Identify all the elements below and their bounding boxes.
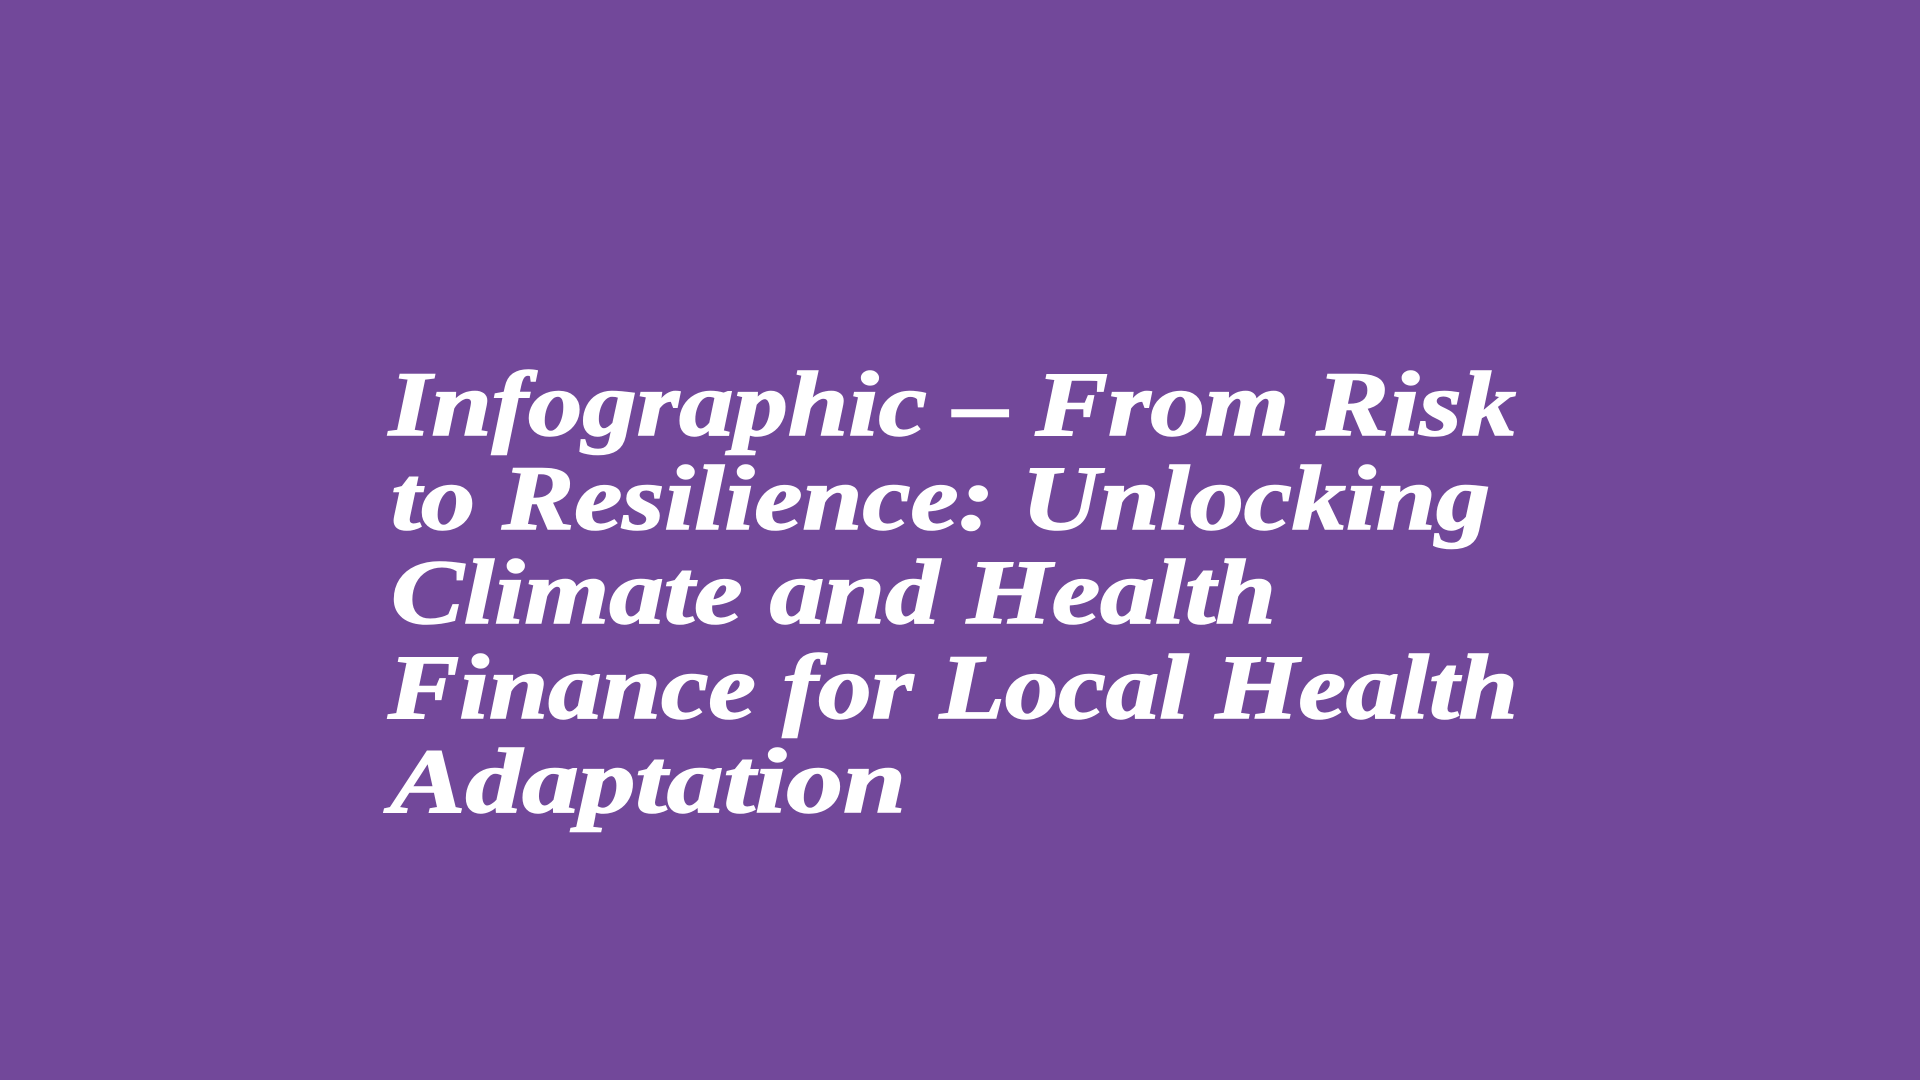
title: Adaptation [384, 730, 906, 832]
title: Finance for Local Health [387, 636, 1518, 738]
title: to Resilience: Unlocking [391, 447, 1490, 549]
title: Infographic – From Risk [388, 353, 1516, 455]
title [384, 353, 1518, 832]
title: Climate and Health [391, 541, 1276, 643]
